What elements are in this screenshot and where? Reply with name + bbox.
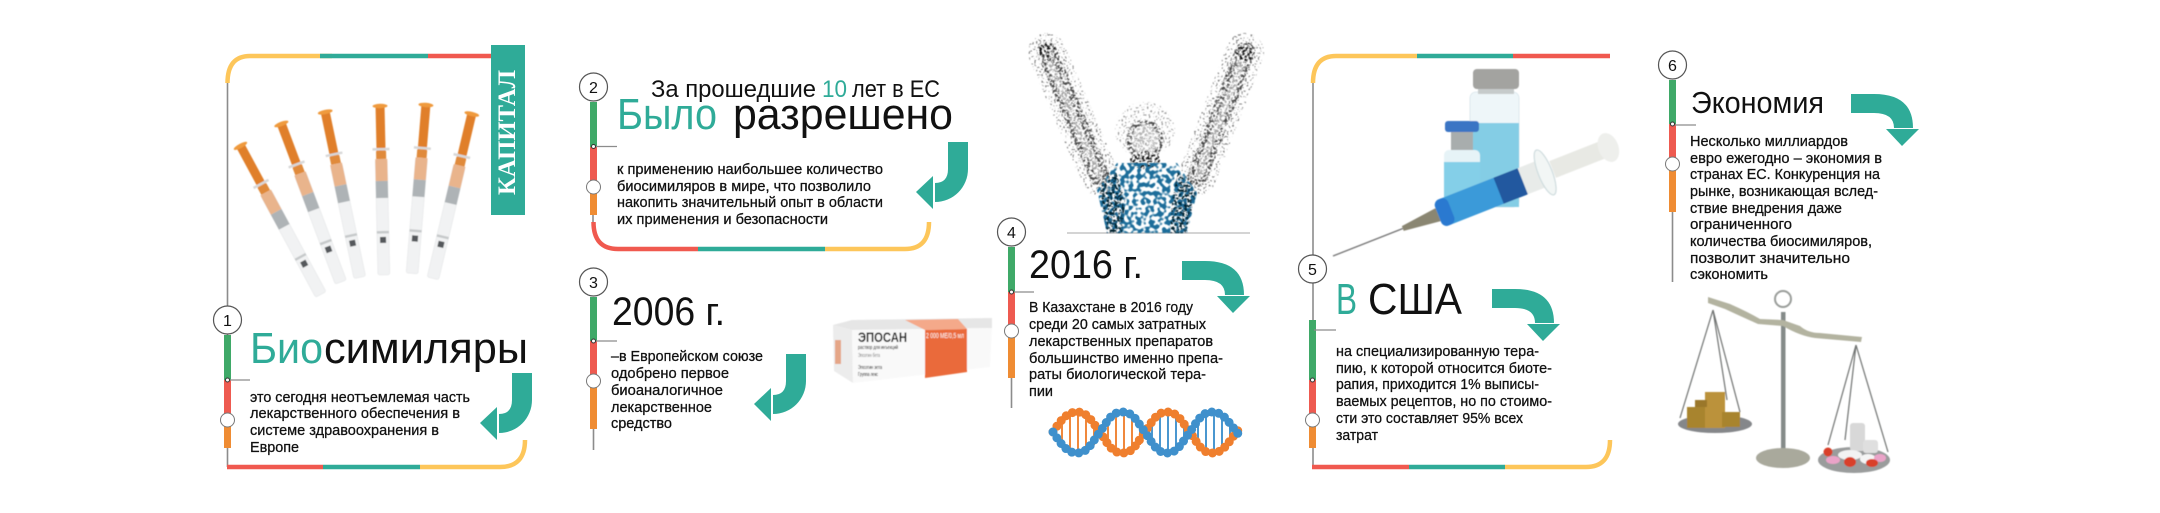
text: EU approval description: биосимиляров в мире, что позволило [617, 178, 871, 195]
heading: biosimilars: симиляры [324, 324, 528, 373]
text: biosimilars description: системе здравоохранения в [250, 422, 439, 439]
timeline rail 4 [998, 218, 1034, 408]
text: USA description: ваемых рецептов, но по стоимо- [1336, 393, 1552, 410]
heading: past ten years in EU: 10 [822, 76, 847, 103]
illustration: particle figure with raised arms [1038, 43, 1254, 233]
text: savings description: Несколько миллиардов [1690, 133, 1848, 150]
icon: DNA helix [1053, 412, 1240, 453]
text: USA description: пию, к которой относится биоте- [1336, 360, 1552, 377]
label: capital [491, 45, 525, 215]
text: USA description: на специализированную тера- [1336, 343, 1539, 360]
illustration: vials and syringe [1324, 69, 1627, 278]
heading: past ten years in EU: За прошедшие [651, 76, 816, 103]
icon: six syringes [232, 102, 481, 299]
text: EU approval description: к применению наибольшее количество [617, 161, 883, 178]
heading: biosimilars: Био [250, 324, 323, 373]
text: biosimilars description: Европе [250, 439, 299, 456]
heading: 2016: 2016 г. [1029, 243, 1143, 287]
timeline rail 3: 3 [589, 275, 598, 292]
label: capital: КАПИТАЛ [494, 70, 521, 195]
text: biosimilars description: это сегодня неотъемлемая часть [250, 389, 470, 406]
text: savings description: сэкономить [1690, 266, 1768, 283]
text: savings description: рынке, возникающая вслед- [1690, 183, 1878, 200]
timeline rail 3 [580, 268, 617, 450]
text: savings description: позволит значительно [1690, 250, 1850, 267]
text: EU approval description [617, 161, 883, 228]
panel 2: approved in EU [580, 73, 968, 249]
text: Kazakhstan 2016 description: пии [1029, 383, 1053, 400]
icon: Eposan medicine box: 2 000 МЕ/0,5 мл [926, 333, 964, 340]
text: USA description: затрат [1336, 427, 1378, 444]
text: savings description: евро ежегодно – экономия в [1690, 150, 1882, 167]
heading: in the USA: США [1368, 275, 1463, 324]
timeline rail 4: 4 [1007, 225, 1016, 242]
timeline rail 6: 6 [1668, 58, 1677, 75]
text: Kazakhstan 2016 description: большинство именно препа- [1029, 350, 1223, 367]
panel 3: 2006 [580, 268, 992, 450]
panel 4: 2016 [998, 43, 1254, 453]
timeline rail 2: 2 [589, 80, 598, 97]
heading: past ten years in EU: лет в ЕС [852, 76, 940, 103]
heading: savings: Экономия [1691, 85, 1824, 120]
icon: Eposan medicine box: ЭПОСАН [858, 329, 907, 345]
panel 1: biosimilars [214, 45, 532, 467]
text: 2006 description: –в Европейском союзе [611, 348, 763, 365]
text: savings description: ствие внедрения даже [1690, 200, 1842, 217]
arrow: down-left [480, 373, 532, 440]
text: EU approval description: их применения и безопасности [617, 211, 828, 228]
text: savings description: ограниченного [1690, 216, 1792, 233]
timeline rail 2 [580, 73, 617, 215]
timeline rail 6 [1658, 51, 1696, 282]
text: Kazakhstan 2016 description: раты биологической тера- [1029, 366, 1206, 383]
heading: in the USA: В [1336, 275, 1357, 324]
icon: Eposan medicine box: раствор для инъекций [858, 344, 898, 351]
text: 2006 description: биоаналогичное [611, 382, 723, 399]
heading: 2006: 2006 г. [612, 290, 725, 334]
text: USA description: рапия, приходится 1% выписы- [1336, 376, 1539, 393]
illustration: scales with coins and pills [1678, 291, 1890, 473]
panel 6: savings [1658, 51, 1919, 473]
text: Kazakhstan 2016 description: среди 20 самых затратных [1029, 316, 1206, 333]
text: 2006 description: одобрено первое [611, 365, 729, 382]
heading: was approved [617, 90, 953, 139]
text: USA description: сти это составляет 95% всех [1336, 410, 1523, 427]
icon: Eposan medicine box: Эпоэтин зета [858, 365, 882, 371]
timeline rail 1 [214, 306, 250, 448]
arrow: down-left [916, 142, 968, 209]
timeline rail 5: 5 [1308, 262, 1317, 279]
text: USA description [1336, 343, 1552, 444]
icon: Eposan medicine box: Группа лекс [858, 372, 878, 378]
heading: was approved: разрешено [733, 90, 953, 139]
heading: was approved: Было [617, 90, 717, 139]
frame with coloured corners [1312, 56, 1610, 467]
arrow: down-left [754, 354, 806, 421]
text: savings description: странах ЕС. Конкуренция на [1690, 166, 1881, 183]
frame with coloured corners [227, 56, 525, 467]
arrow: right-down [1851, 94, 1919, 146]
text: Kazakhstan 2016 description: В Казахстане в 2016 году [1029, 299, 1193, 316]
timeline rail 1: 1 [223, 313, 232, 330]
text: biosimilars description: лекарственного обеспечения в [250, 405, 460, 422]
text: savings description: количества биосимиляров, [1690, 233, 1872, 250]
text: savings description [1690, 133, 1882, 283]
arrow: right-down [1492, 289, 1560, 341]
arrow: right-down [1182, 261, 1250, 313]
icon: Eposan medicine box [833, 318, 992, 383]
text: biosimilars description [250, 389, 470, 456]
heading: past ten years in EU [651, 76, 940, 103]
frame with coloured corners [593, 215, 929, 249]
text: EU approval description: накопить значительный опыт в области [617, 194, 883, 211]
text: 2006 description [611, 348, 763, 432]
icon: Eposan medicine box: Эпоэтин бета [858, 353, 880, 359]
text: Kazakhstan 2016 description [1029, 299, 1223, 400]
text: 2006 description: лекарственное [611, 399, 712, 416]
panel 5: in the USA [1298, 56, 1627, 467]
timeline rail 5 [1298, 255, 1336, 448]
text: Kazakhstan 2016 description: лекарственных препаратов [1029, 333, 1213, 350]
text: 2006 description: средство [611, 415, 672, 432]
